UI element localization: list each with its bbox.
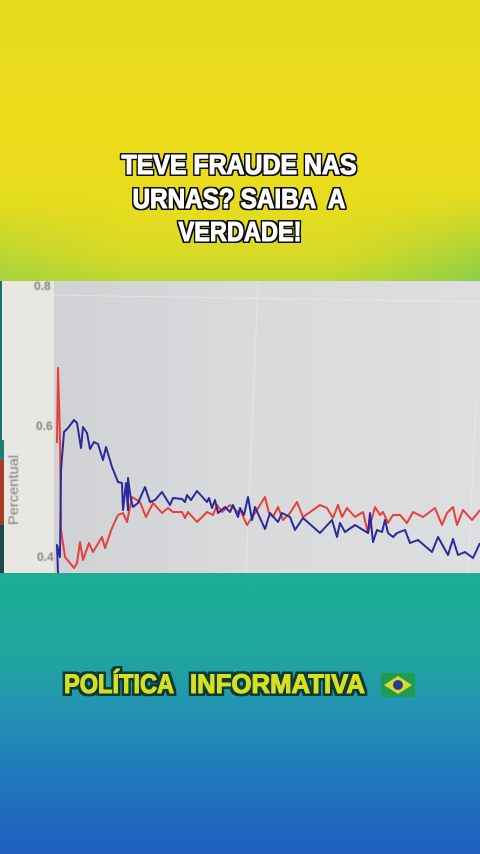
y-axis margin [2, 281, 54, 573]
y-axis ticks [34, 279, 54, 564]
brand label: POLÍTICA [64, 668, 174, 699]
title: TEVE FRAUDE NAS [122, 149, 356, 180]
y-axis ticks: 0.8 [34, 279, 51, 293]
blue series [57, 420, 480, 573]
y-axis ticks: 0.4 [37, 550, 54, 564]
icon: Brazil flag [381, 673, 415, 697]
panel: teal-blue bottom background [0, 573, 480, 854]
y-axis ticks: 0.6 [36, 419, 53, 433]
panel: line chart [0, 279, 480, 573]
left edge strip [0, 281, 4, 573]
red series [57, 368, 480, 568]
title [122, 149, 356, 247]
panel: yellow top background [0, 0, 480, 281]
brand label [64, 668, 365, 699]
brand label: INFORMATIVA [190, 669, 365, 699]
title: URNAS? SAIBA A [132, 183, 346, 214]
y-axis label: Percentual [5, 455, 21, 525]
title: VERDADE! [178, 216, 302, 247]
